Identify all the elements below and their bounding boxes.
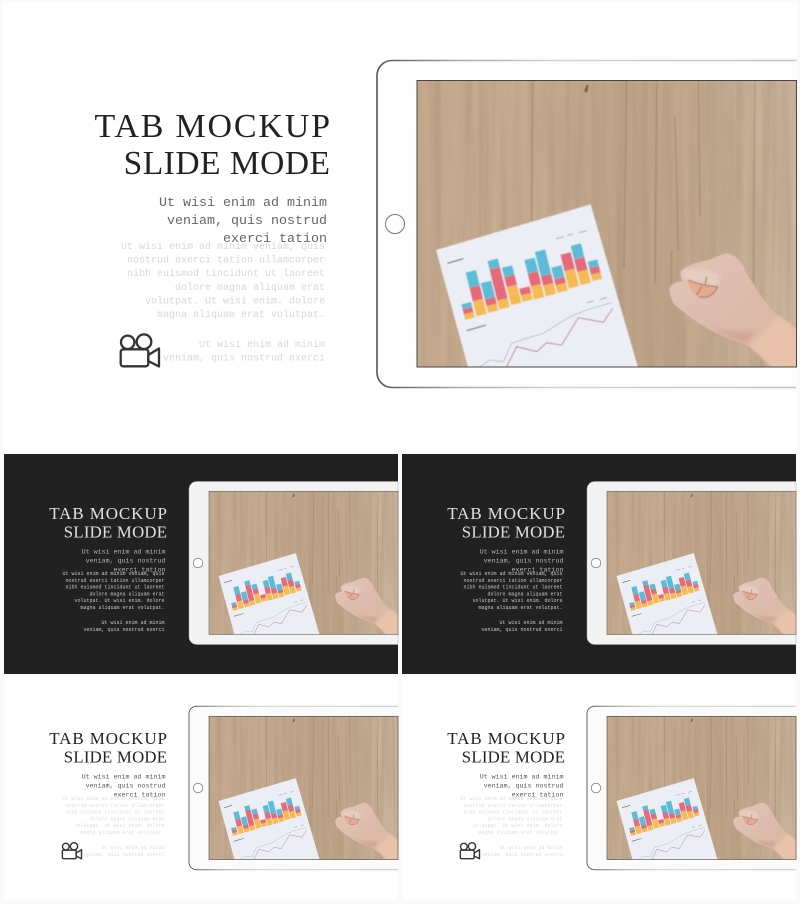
body text: volutpat. Ut wisi enim. dolore <box>145 295 325 307</box>
caption text: Ut wisi enim ad minim <box>499 845 562 851</box>
panel: light slide left <box>4 678 399 900</box>
body text: volutpat. Ut wisi enim. dolore <box>74 598 164 604</box>
panel: dark slide left <box>4 454 399 674</box>
panel: light slide right <box>402 678 797 900</box>
icon: movie camera <box>121 334 159 366</box>
subtitle: veniam, quis nostrud <box>167 214 327 229</box>
body text: Ut wisi enim ad minim veniam, quis <box>62 796 164 802</box>
icon: movie camera <box>62 843 82 859</box>
body text: nibh euismod tincidunt ut laoreet <box>65 810 164 816</box>
subtitle: Ut wisi enim ad minim <box>82 548 166 556</box>
caption text: veniam, quis nostrud exerci <box>83 852 164 858</box>
body text: nostrud exerci tation ullamcorper <box>463 578 562 584</box>
caption text: Ut wisi enim ad minim <box>101 845 164 851</box>
subtitle: exerci tation <box>114 566 166 574</box>
body text: Ut wisi enim ad minim veniam, quis <box>121 241 325 253</box>
body text: volutpat. Ut wisi enim. dolore <box>74 823 164 829</box>
subtitle: exerci tation <box>512 566 564 574</box>
subtitle: exerci tation <box>114 790 166 798</box>
subtitle: Ut wisi enim ad minim <box>480 548 564 556</box>
body text: dolore magna aliquam erat <box>487 591 562 597</box>
body text: volutpat. Ut wisi enim. dolore <box>472 823 562 829</box>
body text: nostrud exerci tation ullamcorper <box>127 255 325 267</box>
tablet mockup <box>377 60 800 388</box>
body text: nibh euismod tincidunt ut laoreet <box>463 810 562 816</box>
body text: magna aliquam erat volutpat. <box>478 830 562 836</box>
body text: magna aliquam erat volutpat. <box>80 605 164 611</box>
caption text: veniam, quis nostrud exerci <box>163 353 325 365</box>
title: SLIDE MODE <box>462 748 565 766</box>
caption text: Ut wisi enim ad minim <box>101 620 164 626</box>
body text: nibh euismod tincidunt ut laoreet <box>463 585 562 591</box>
caption text: veniam, quis nostrud exerci <box>83 627 164 633</box>
body text: nostrud exerci tation ullamcorper <box>65 578 164 584</box>
body text: nostrud exerci tation ullamcorper <box>65 803 164 809</box>
body text: Ut wisi enim ad minim veniam, quis <box>460 796 562 802</box>
tablet mockup <box>189 706 399 870</box>
body text: dolore magna aliquam erat <box>487 816 562 822</box>
body text: magna aliquam erat volutpat. <box>478 605 562 611</box>
subtitle: exerci tation <box>223 232 327 247</box>
title: TAB MOCKUP <box>95 108 332 145</box>
body text: dolore magna aliquam erat <box>89 591 164 597</box>
subtitle: Ut wisi enim ad minim <box>159 196 327 211</box>
title: SLIDE MODE <box>124 145 330 182</box>
title: TAB MOCKUP <box>49 504 168 523</box>
subtitle: Ut wisi enim ad minim <box>480 772 564 780</box>
body text: Ut wisi enim ad minim veniam, quis <box>460 571 562 577</box>
title: SLIDE MODE <box>64 748 167 766</box>
title: SLIDE MODE <box>64 522 167 542</box>
panel: main slide <box>95 60 797 388</box>
subtitle: Ut wisi enim ad minim <box>82 772 166 780</box>
body text: Ut wisi enim ad minim veniam, quis <box>62 571 164 577</box>
body text: magna aliquam erat volutpat. <box>157 309 325 321</box>
tablet mockup <box>587 706 797 870</box>
title: SLIDE MODE <box>462 522 565 542</box>
body text: magna aliquam erat volutpat. <box>80 830 164 836</box>
subtitle: veniam, quis nostrud <box>86 556 166 564</box>
body text: dolore magna aliquam erat <box>89 816 164 822</box>
subtitle: veniam, quis nostrud <box>86 782 166 790</box>
subtitle: veniam, quis nostrud <box>484 782 564 790</box>
icon: movie camera <box>460 843 480 859</box>
caption text: veniam, quis nostrud exerci <box>481 627 562 633</box>
body text: dolore magna aliquam erat <box>175 282 325 294</box>
subtitle: exerci tation <box>512 790 564 798</box>
body text: nibh euismod tincidunt ut laoreet <box>127 268 325 280</box>
subtitle: veniam, quis nostrud <box>484 556 564 564</box>
caption text: veniam, quis nostrud exerci <box>481 852 562 858</box>
caption text: Ut wisi enim ad minim <box>199 339 325 351</box>
body text: volutpat. Ut wisi enim. dolore <box>472 598 562 604</box>
title: TAB MOCKUP <box>447 729 566 748</box>
panel: dark slide right <box>402 454 797 674</box>
body text: nostrud exerci tation ullamcorper <box>463 803 562 809</box>
caption text: Ut wisi enim ad minim <box>499 620 562 626</box>
tablet mockup <box>587 482 797 644</box>
title: TAB MOCKUP <box>49 729 168 748</box>
title: TAB MOCKUP <box>447 504 566 523</box>
body text: nibh euismod tincidunt ut laoreet <box>65 585 164 591</box>
tablet mockup <box>189 482 399 644</box>
